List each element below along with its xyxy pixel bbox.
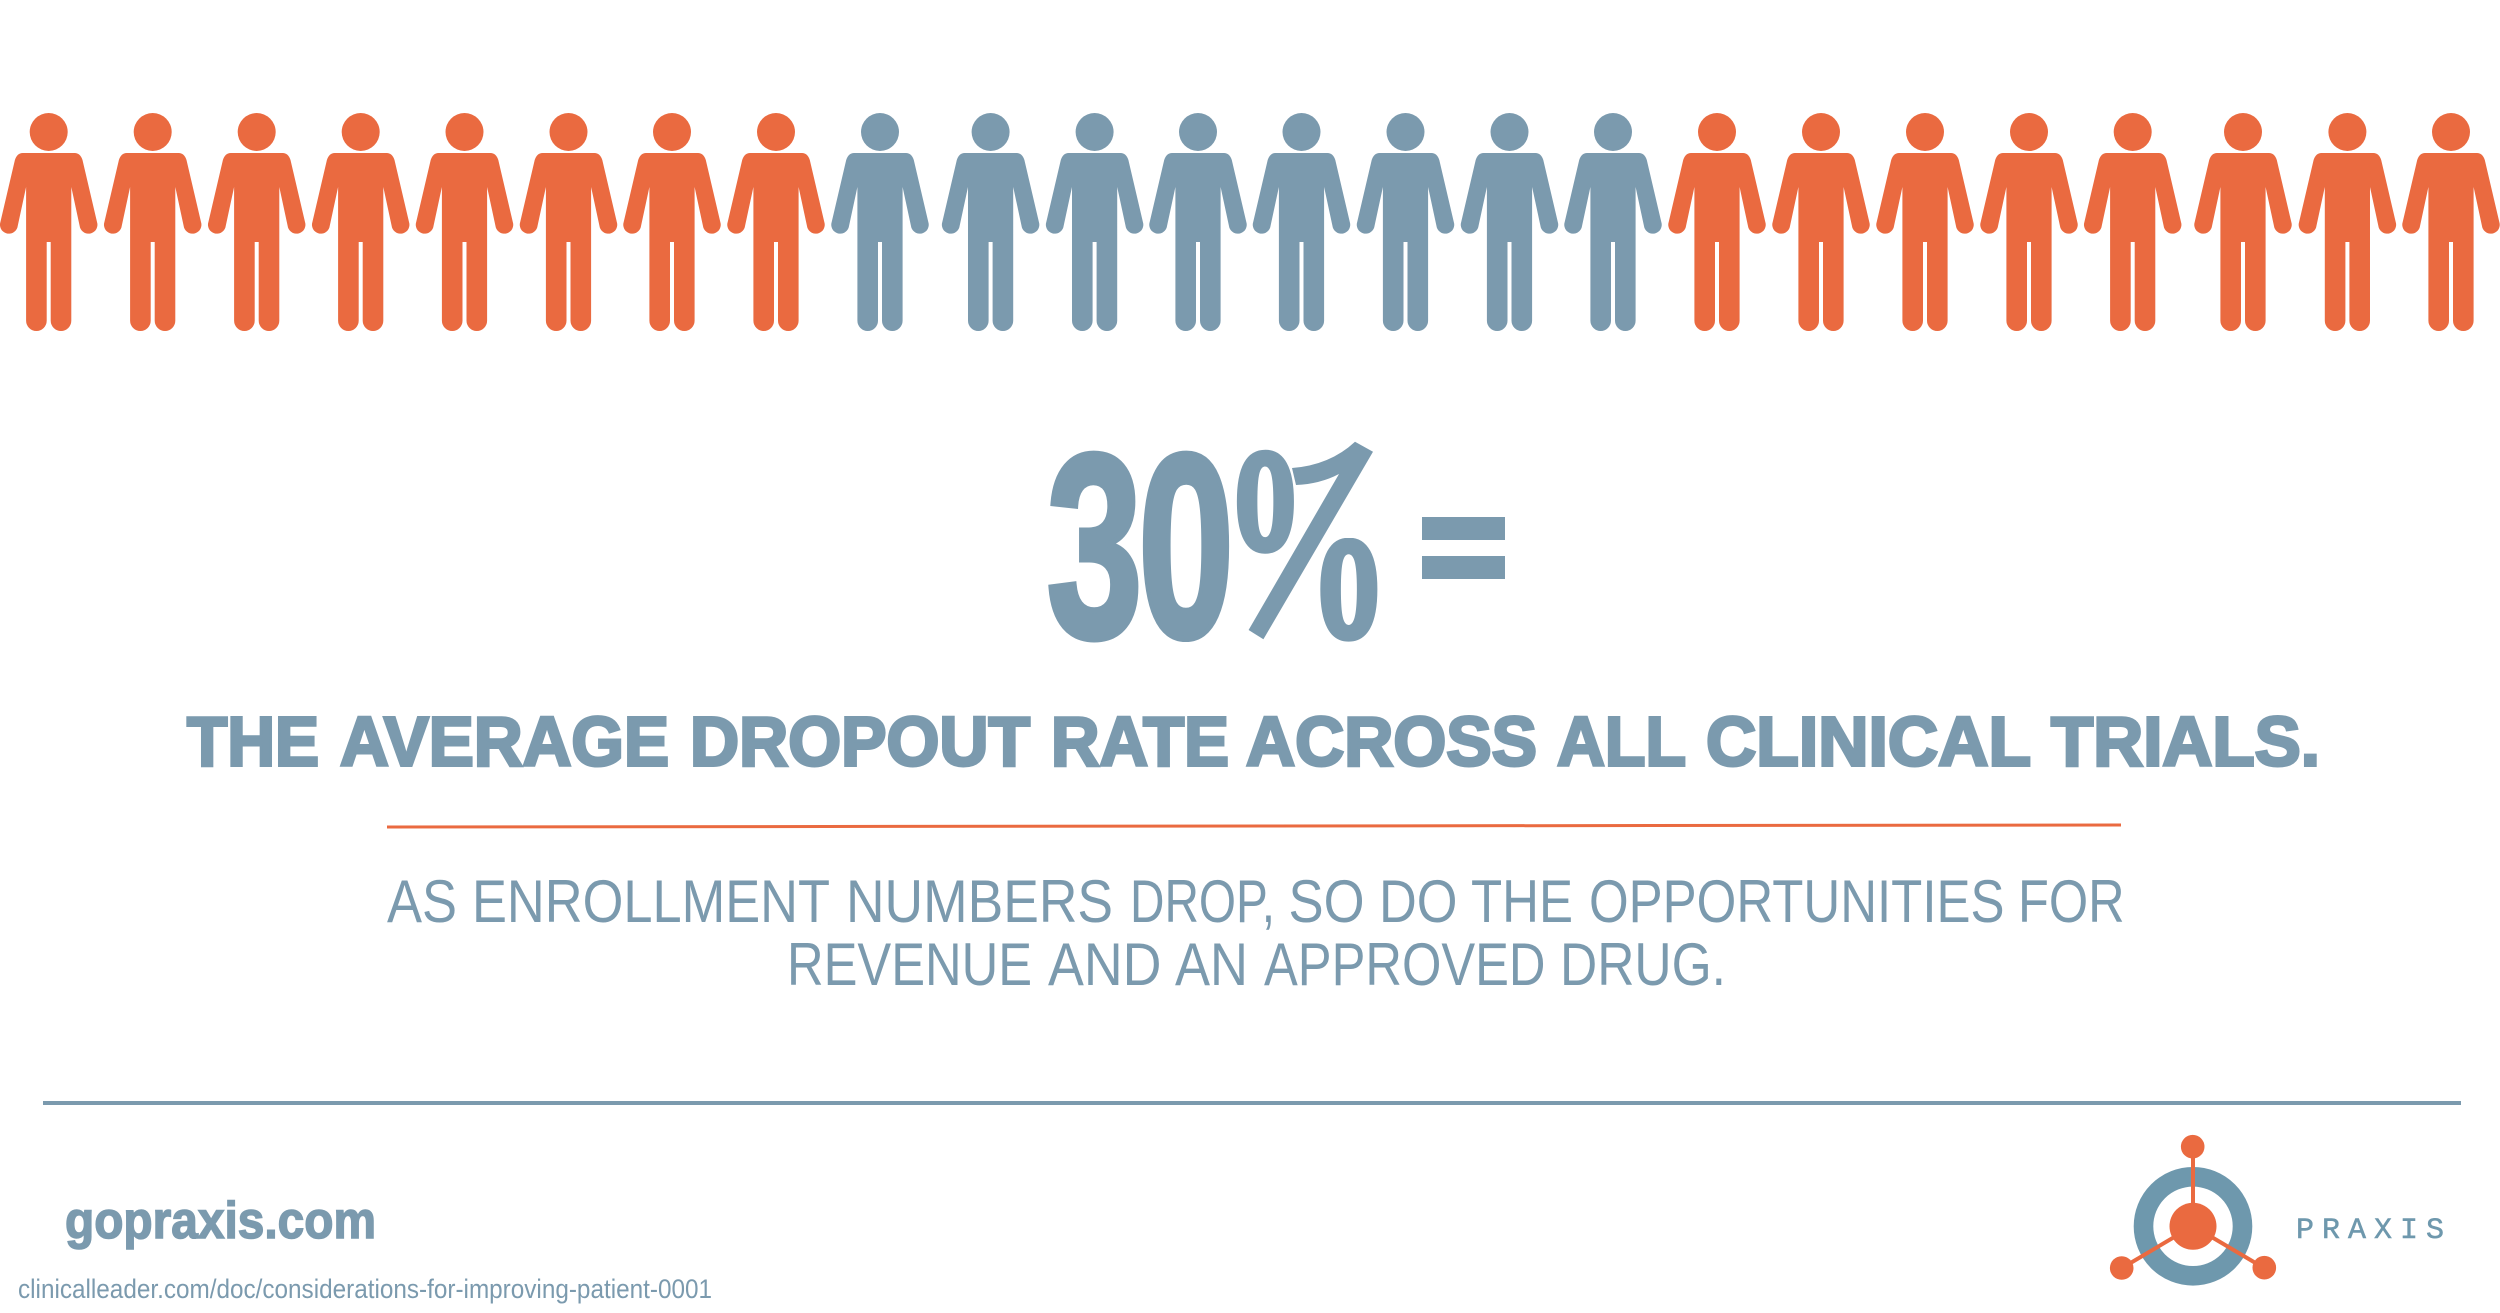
website: gopraxis.com [65, 1192, 376, 1250]
subtext line 1: THE [1471, 868, 1573, 935]
subtext line 1: ENROLLMENT [472, 868, 830, 935]
icon: orange person group right [1668, 113, 2500, 331]
subtext line 1: NUMBERS [846, 868, 1113, 935]
heading: AVERAGE [340, 702, 669, 780]
number 30: 30 [1046, 400, 1230, 693]
heading [187, 702, 2320, 780]
percent slash and flourish accent [1249, 442, 1373, 639]
row of 24 person icons [0, 113, 2500, 331]
heading: DROPOUT [690, 702, 1030, 780]
heading: RATE [1051, 702, 1229, 780]
subtext line 2: AND [1048, 931, 1162, 998]
subtext line 1: AS [387, 868, 457, 935]
heading: ALL [1557, 702, 1686, 780]
source citation: clinicalleader.com/doc/considerations-for-improving-patient-0001 [18, 1274, 712, 1304]
subtext line 1: FOR [2018, 868, 2125, 935]
subtext line 1 [387, 868, 2125, 935]
subtext line 1: OPPORTUNITIES [1589, 868, 2004, 935]
subtext line 2: DRUG. [1560, 931, 1726, 998]
heading: ACROSS [1246, 702, 1537, 780]
big statistic: 30% = [1048, 442, 1505, 642]
subtext line 2: AN [1175, 931, 1248, 998]
heading: THE [187, 702, 319, 780]
subtext line 1: DROP, [1130, 868, 1275, 935]
subtext line 1: SO [1288, 868, 1364, 935]
subtext line 1: DO [1379, 868, 1458, 935]
icon: blue person group (30%) [831, 113, 1662, 331]
icon: Praxis logo [2110, 1135, 2276, 1280]
subtext line 2 [787, 931, 1726, 998]
footer rule [43, 1101, 2461, 1105]
icon: orange person group [0, 113, 825, 331]
percent sign: % [1220, 390, 1392, 696]
subtext [387, 868, 2125, 998]
subtext line 2: APPROVED [1264, 931, 1546, 998]
equals sign [1422, 517, 1505, 579]
subtext line 2: REVENUE [787, 931, 1032, 998]
heading: TRIALS. [2051, 702, 2320, 780]
heading: CLINICAL [1706, 702, 2031, 780]
Praxis wordmark: PRAXIS [2296, 1214, 2444, 1248]
orange divider [387, 825, 2121, 827]
